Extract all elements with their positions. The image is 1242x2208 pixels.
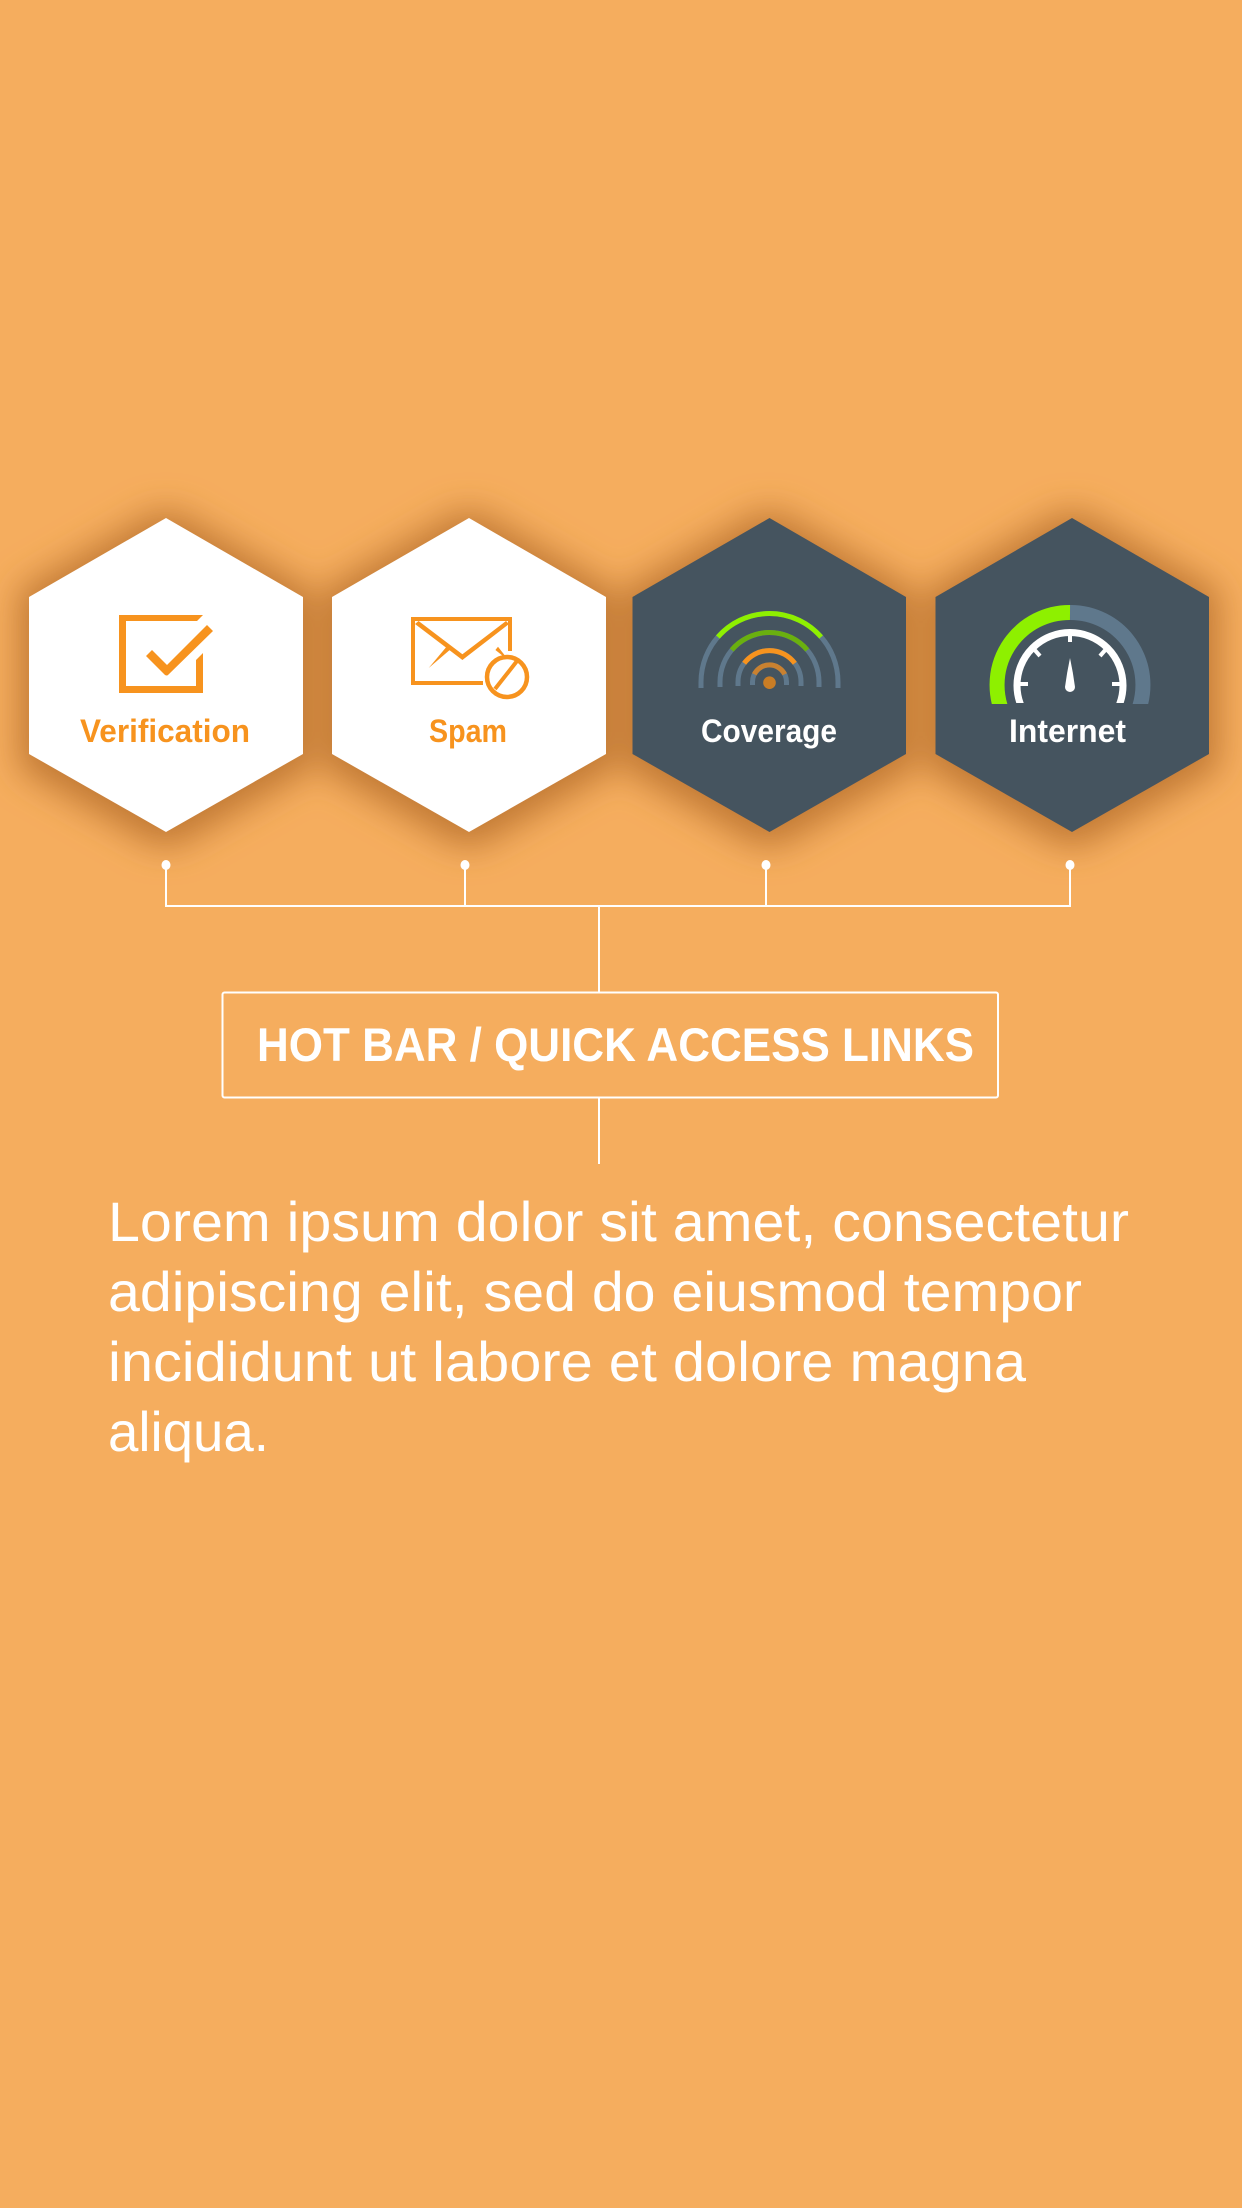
hexagon: verification bbox=[29, 518, 303, 832]
label: Internet: Internet bbox=[1009, 713, 1126, 749]
body paragraph: adipiscing elit, sed do eiusmod tempor bbox=[108, 1260, 1082, 1323]
label: Verification: Verification bbox=[80, 713, 250, 749]
icon: checkbox with tick bbox=[119, 615, 213, 693]
icon: envelope with block sign bbox=[413, 619, 527, 697]
hexagon shadows bbox=[29, 518, 1209, 832]
heading box bbox=[222, 992, 998, 1098]
icon: signal arcs bbox=[701, 614, 838, 689]
body paragraph bbox=[108, 1190, 1129, 1463]
label: Spam: Spam bbox=[429, 713, 507, 749]
connector lines with dots bbox=[162, 860, 1074, 1164]
body paragraph: incididunt ut labore et dolore magna bbox=[108, 1330, 1027, 1393]
heading: HOT BAR / QUICK ACCESS LINKS bbox=[257, 1018, 974, 1071]
infographic canvas bbox=[2, 498, 1236, 1462]
body paragraph: aliqua. bbox=[108, 1400, 269, 1463]
hexagon: spam bbox=[332, 518, 606, 832]
icon: speedometer gauge bbox=[990, 605, 1150, 704]
label: Coverage: Coverage bbox=[701, 713, 837, 749]
hexagon: coverage bbox=[632, 518, 906, 832]
hexagon: internet bbox=[936, 518, 1209, 832]
body paragraph: Lorem ipsum dolor sit amet, consectetur bbox=[108, 1190, 1129, 1253]
